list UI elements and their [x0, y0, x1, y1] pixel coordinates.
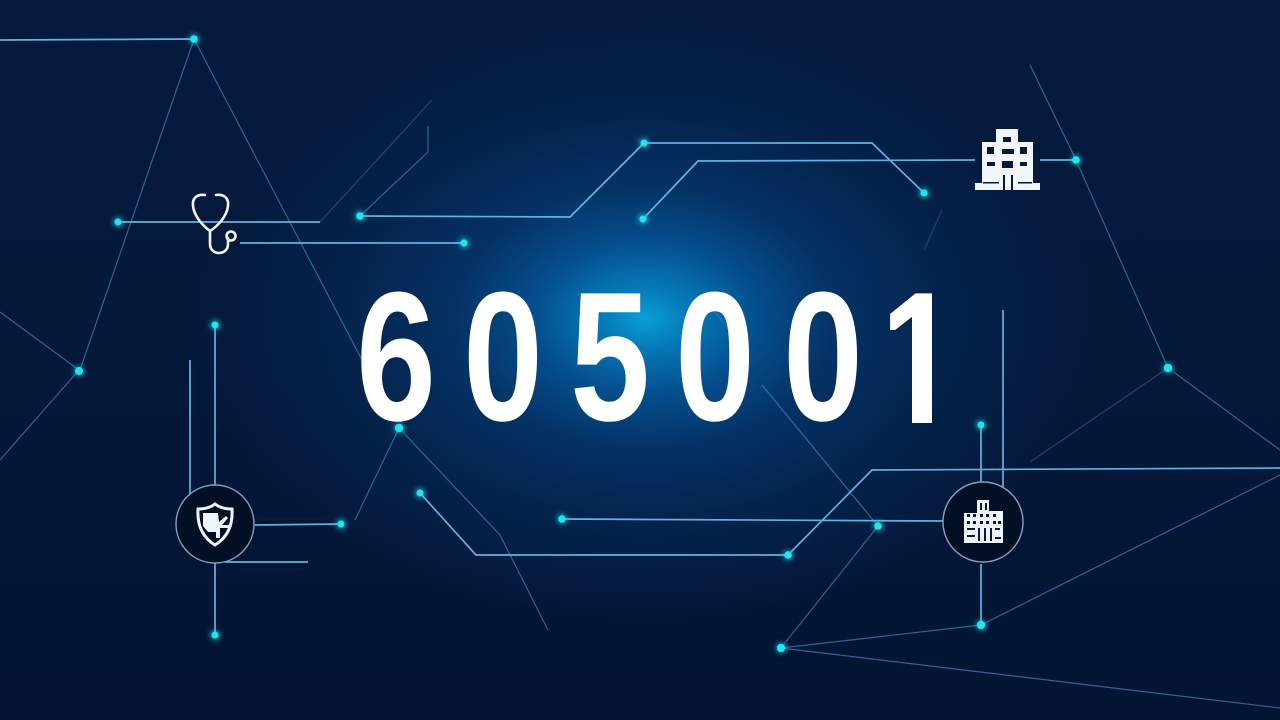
postal code number 605001 [361, 292, 932, 423]
postal code number 605001: 5 [570, 254, 650, 459]
postal code number 605001: 6 [356, 254, 436, 459]
icon: stethoscope [193, 195, 236, 253]
icon: hospital building [975, 129, 1040, 191]
postal code number 605001: 0 [675, 254, 755, 459]
postal code number 605001: 0 [783, 254, 863, 459]
icon: office building badge [943, 482, 1023, 562]
network nodes [74, 34, 1173, 653]
postal code number 605001: 1 [880, 254, 962, 460]
postal code number 605001: 0 [463, 254, 543, 459]
icon: shield badge [176, 485, 254, 563]
